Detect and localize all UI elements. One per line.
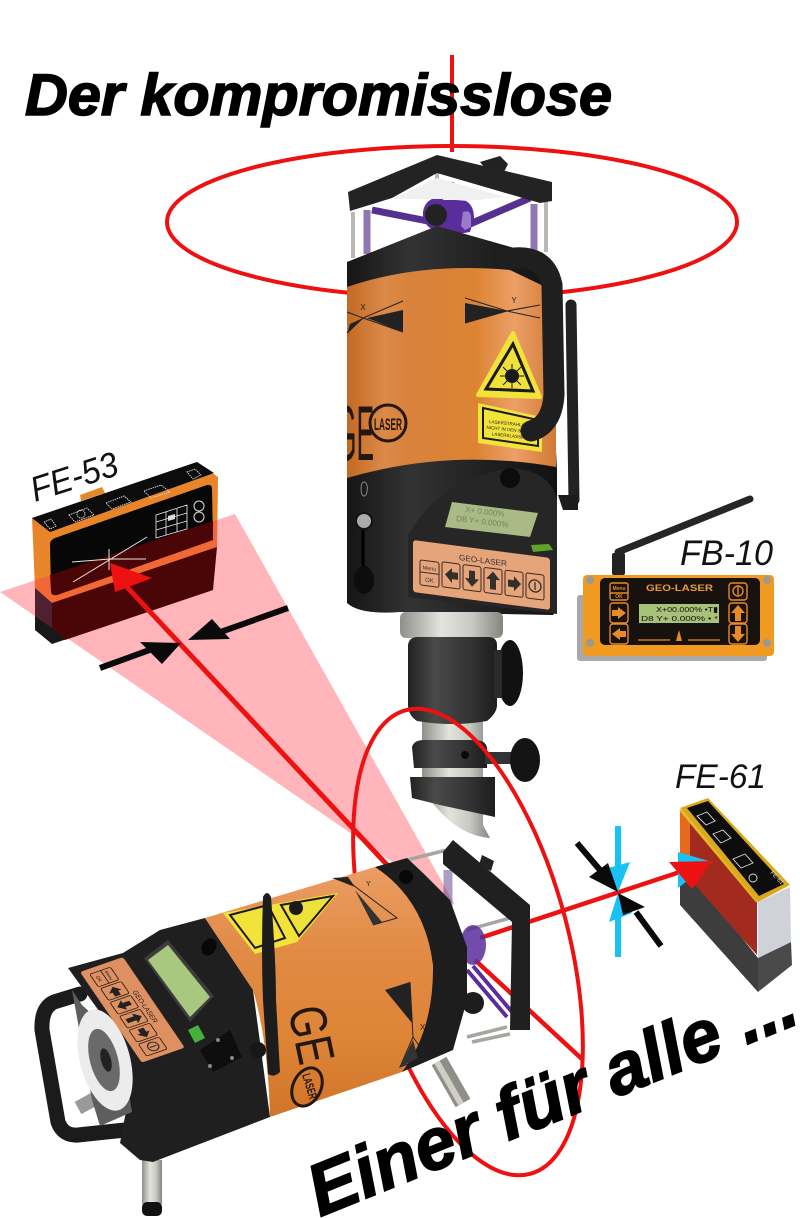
GEO LASER logo: LASER <box>299 1072 320 1101</box>
antenna <box>571 305 574 500</box>
keypad panel <box>413 540 550 610</box>
upper pipe laser device <box>336 155 578 615</box>
LCD readout: DB Y+ 0.000% <box>456 514 509 529</box>
remote LCD: X+00.000% •T▮ <box>656 605 718 614</box>
lower housing <box>680 860 758 992</box>
remote keys <box>610 583 747 644</box>
red arrow to FE-53 <box>110 563 390 868</box>
Y level mark <box>465 296 540 323</box>
vertical laser line <box>450 55 454 196</box>
laser warning label <box>223 893 338 954</box>
protective cage <box>348 155 552 258</box>
LCD bezel and screen <box>144 940 214 1022</box>
laser warning label: LASERKLASSE <box>492 431 524 440</box>
end face <box>758 887 791 958</box>
tripod mount <box>400 612 540 838</box>
remote LCD: D8 Y+ 0.000% • * <box>641 614 718 623</box>
receiver FE-61 <box>680 798 792 992</box>
label FE-61: FE-61 <box>675 758 766 796</box>
remote screws <box>590 580 767 643</box>
carry handle <box>42 994 125 1135</box>
laser warning label: LASERSTRAHLUNG <box>489 419 532 428</box>
LCD readout <box>445 502 538 537</box>
orange cylinder <box>205 867 433 1117</box>
red laser lines through cage <box>475 867 695 1060</box>
laser fan beam <box>0 514 455 905</box>
keypad panel: GEO-LASER <box>130 990 159 1024</box>
remote logo: GEO-LASER <box>646 583 714 593</box>
label FE-53: FE-53 <box>25 445 124 510</box>
Y level mark <box>332 877 397 925</box>
remote LCD <box>639 604 719 623</box>
signal icon and rules <box>638 639 720 641</box>
orange case <box>32 462 218 603</box>
level bubble <box>531 544 553 552</box>
black tolerance arrows <box>577 843 661 946</box>
top strip <box>680 798 790 902</box>
keypad panel <box>80 957 185 1063</box>
level bubble <box>188 1025 205 1043</box>
title: Der kompromisslose <box>25 63 612 128</box>
top strip icons <box>44 469 201 529</box>
right leg <box>437 1061 463 1104</box>
laser warning label <box>478 333 542 452</box>
knob on top <box>80 487 105 501</box>
remote case <box>583 575 774 656</box>
wireless remote FB-10: Menu <box>612 586 626 592</box>
mounting cage <box>407 840 530 1042</box>
antenna <box>250 893 280 1076</box>
antenna <box>618 499 750 552</box>
keypad panel: OK <box>93 975 104 984</box>
target grid <box>156 505 187 538</box>
horizontal pipe laser device <box>42 840 530 1216</box>
connector plate <box>200 1030 242 1072</box>
bottom leg <box>142 1160 162 1216</box>
carry handle <box>507 258 554 431</box>
wireless remote FB-10: OK <box>615 594 623 600</box>
beam tint on FE-53 dark areas <box>35 521 217 640</box>
receiver display <box>50 485 213 595</box>
front housing <box>68 918 270 1162</box>
GEO logo <box>194 501 204 522</box>
strip icons <box>697 812 757 882</box>
horizontal laser plane ellipse <box>167 146 737 298</box>
keypad panel: GEO-LASER <box>459 553 507 568</box>
label FB-10: FB-10 <box>680 534 774 573</box>
cyan vertical tolerance arrows <box>608 826 632 957</box>
X level mark: X <box>360 303 366 312</box>
lens port <box>198 936 220 958</box>
lower housing <box>35 545 215 644</box>
wireless remote FB-10 <box>577 499 774 661</box>
GEO LASER logo <box>347 404 408 461</box>
end cap <box>370 858 467 1072</box>
keypad panel: OK <box>425 578 434 585</box>
X level mark <box>385 982 427 1067</box>
Y level mark: Y <box>511 296 517 305</box>
laser warning label: NICHT IN DEN STRAHL <box>486 425 536 435</box>
upper body housing <box>347 226 557 615</box>
X level mark <box>347 301 403 334</box>
keypad panel: Menu <box>103 970 115 981</box>
battery symbols <box>157 534 203 557</box>
LCD readout: X+ 0.000% <box>465 505 505 519</box>
GEO LASER logo: GE <box>276 1000 345 1069</box>
X level mark: X <box>420 1023 426 1032</box>
remote shadow <box>577 595 767 661</box>
model text on strip: FE-61 <box>769 870 785 887</box>
black width arrows FE-53 <box>100 608 288 668</box>
orange body band <box>347 268 556 478</box>
keypad panel: Menu <box>423 565 436 573</box>
Y level mark: Y <box>366 881 371 888</box>
GEO LASER logo: LASER <box>374 415 402 434</box>
left leg <box>78 1096 100 1108</box>
vertical laser plane ellipse <box>309 684 627 1200</box>
receiver FE-53 <box>32 462 218 644</box>
target crosshair <box>72 537 147 582</box>
display housing <box>408 468 557 614</box>
GEO LASER logo: GE <box>336 389 374 477</box>
remote face <box>600 578 760 645</box>
top control strip <box>32 462 214 532</box>
receiver window <box>680 810 757 955</box>
back plate ring <box>67 990 143 1126</box>
side controls <box>354 482 374 594</box>
red and cyan arrowheads to FE-61 <box>669 852 712 889</box>
